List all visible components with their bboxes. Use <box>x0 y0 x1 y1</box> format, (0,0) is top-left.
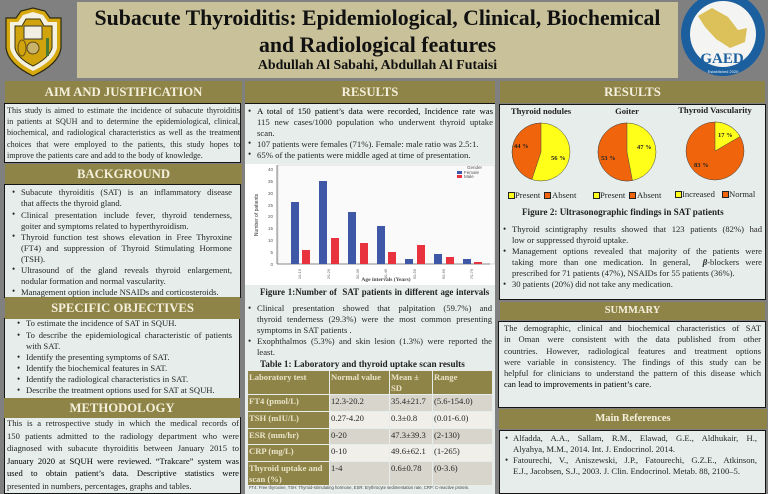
list: objectives: To estimate the incidence of SAT in SQUH. <box>26 318 177 328</box>
pie charts: ultrasonographic findings: 53 % <box>601 155 616 162</box>
list: results summary: scan. <box>257 128 275 138</box>
bar chart: patients by age interval: Male <box>464 174 474 179</box>
legend: thyroid nodules: Present <box>515 190 540 200</box>
table: laboratory results: 49.6±62.1 <box>391 446 426 456</box>
panel: specific objectives <box>4 318 240 399</box>
list: results summary: A total of 150 patient’s data were recorded, Incidence rate was <box>257 106 493 116</box>
list: clinical presentation: symptoms in SAT patients . <box>257 325 352 335</box>
list: objectives: Identify the radiological characteristics in SAT. <box>26 374 188 384</box>
list: results summary: 65% of the patients were middle aged at time of presentation. <box>257 150 470 160</box>
panel: background <box>4 184 241 298</box>
legend: goiter: Present <box>600 190 625 200</box>
pie charts: ultrasonographic findings: Goiter <box>615 106 639 116</box>
text: summary: can lead to improvements in patient’s care. <box>504 379 651 389</box>
list: clinical presentation: Exophthalmos (5.3%) and skin lesion (1.3%) were reported the <box>257 336 492 346</box>
text: summary: helpful for clinicians to understand the pattern of this disease which <box>504 368 761 378</box>
table: laboratory results: 0.6±0.78 <box>391 463 422 473</box>
text: methodology: This is a retrospective study in which the medical records of <box>7 418 239 428</box>
table: laboratory results: (0-3.6) <box>434 463 458 473</box>
bar chart: patients by age interval: 20-29 <box>326 268 331 279</box>
bar chart: patients by age interval: 10-19 <box>297 268 302 279</box>
bar chart: patients by age interval: 5 <box>270 250 273 255</box>
bar chart: patients by age interval: Number of patients <box>254 193 260 236</box>
table: laboratory results: 0-10 <box>331 446 347 456</box>
caption: table 1: Table 1: Laboratory and thyroid uptake scan results <box>260 359 465 369</box>
table: laboratory results: Laboratory test <box>249 372 307 382</box>
list: references <box>513 433 757 476</box>
logo: GAED: GAED <box>700 51 744 67</box>
text: aim: improve the patients care and add to the body of knowledge. <box>7 151 203 160</box>
panel: specific objectives: • <box>17 363 20 373</box>
panel: main references <box>499 430 766 494</box>
panel: specific objectives: • <box>17 385 20 395</box>
panel: specific objectives: • <box>17 352 20 362</box>
heading: results middle: RESULTS <box>342 85 398 99</box>
bar chart: patients by age interval <box>245 164 495 285</box>
list: background points: goiter and symptoms related to hyperthyroidism. <box>21 221 189 231</box>
panel: results middle <box>245 103 495 494</box>
logo: university shield <box>5 7 62 76</box>
text: methodology: 150 patients admitted to the radiology department who were <box>7 430 239 440</box>
bar chart: patients by age interval: 40 <box>268 167 273 172</box>
list: scintigraphy and management: prescribed for 71 patients (47%), NSAIDs for 55 patients (36%). <box>512 268 735 278</box>
heading: results right <box>500 81 765 103</box>
table: laboratory results: (2-130) <box>434 430 460 440</box>
text: aim: This study is aimed to estimate the incidence of subacute thyroiditis <box>7 106 240 115</box>
bar chart: patients by age interval: 10 <box>268 238 273 243</box>
panel: results middle: • <box>248 336 251 346</box>
table footnote: FT4: Free thyroxine, TSH: Thyroid-stimulating hormone, ESR: Erythrocyte sedimentation rate, CRP: C-reactive protein. <box>249 485 469 490</box>
panel: background: • <box>12 286 15 296</box>
heading: methodology <box>4 398 240 418</box>
list: results summary: 107 patients were females (71%). Female: male ratio was 2.5:1. <box>257 139 478 149</box>
list: clinical presentation: least. <box>257 347 275 357</box>
table: laboratory results: 35.4±21.7 <box>391 396 426 406</box>
table: laboratory results: TSH (mIU/L) <box>249 413 299 423</box>
text: aim: biochemical, and radiological characteristics as well as the treatment <box>7 128 240 137</box>
text: methodology: diagnosed with subacute thyroiditis between January 2015 to <box>7 443 239 453</box>
legend: goiter <box>593 190 662 200</box>
panel: specific objectives: • <box>17 318 20 328</box>
table: laboratory results: Normal value <box>331 372 381 382</box>
pie charts: ultrasonographic findings: 17 % <box>718 132 733 139</box>
bar chart: patients by age interval: 15 <box>268 226 273 231</box>
list: scintigraphy and management: Thyroid scintigraphy results showed that 123 patients (82%) had <box>512 224 762 234</box>
panel: background: • <box>12 209 15 219</box>
panel: main references: • <box>505 455 508 465</box>
pie charts: ultrasonographic findings: Thyroid nodules <box>511 106 572 116</box>
bar chart: patients by age interval: 35 <box>268 179 273 184</box>
pie charts: ultrasonographic findings: 47 % <box>637 144 652 151</box>
heading: main references: Main References <box>595 413 671 424</box>
panel: results middle: • <box>248 303 251 313</box>
text: summary: countries. However, radiological features and treatment options <box>504 346 761 356</box>
bar chart: patients by age interval: Age intervals (Years) <box>361 276 411 283</box>
title banner: Abdullah Al Sabahi, Abdullah Al Futaisi <box>258 58 497 73</box>
table: laboratory results: 0-20 <box>331 430 347 440</box>
text: aim <box>7 106 240 160</box>
panel: background: • <box>12 231 15 241</box>
list: scintigraphy and management: Management options revealed that majority of the patients were <box>512 246 762 256</box>
heading: background <box>5 164 242 184</box>
table: laboratory results: (1-265) <box>434 446 460 456</box>
table: laboratory results: 0.3±0.8 <box>391 413 417 423</box>
list: objectives: Describe the treatment options used for SAT at SQUH. <box>26 385 215 395</box>
list: background points: (TSH). <box>21 254 45 264</box>
panel: results right: • <box>503 246 506 256</box>
list: references: E.J., Jacobsen, S.J., 2003. J. Clin. Endocrinol. Metab. 88, 2100–5. <box>513 466 740 476</box>
panel: results middle: • <box>248 138 251 148</box>
list: background points: nodular formation and normal vascularity. <box>21 276 166 286</box>
logo: GAED: Established 2020 <box>708 69 739 74</box>
pie charts: ultrasonographic findings: 56 % <box>551 155 566 162</box>
heading: aim and justification: AIM AND JUSTIFICATION <box>45 85 202 99</box>
title banner: Subacute Thyroiditis: Epidemiological, Clinical, Biochemical <box>95 6 660 30</box>
list: objectives <box>26 318 232 395</box>
pie charts: ultrasonographic findings <box>511 105 753 182</box>
list: scintigraphy and management: low or suppressed thyroid uptake. <box>512 235 628 245</box>
text: methodology <box>7 418 239 491</box>
bar chart: patients by age interval: 0 <box>270 262 273 267</box>
list: background points: (FT4) and suppression of Thyroid Stimulating Hormone <box>21 243 232 253</box>
legend: vascularity: Increased <box>682 189 715 199</box>
bar chart: patients by age interval: 30-39 <box>355 268 360 279</box>
legend: thyroid nodules: Absent <box>552 190 576 200</box>
list: background points: Clinical presentation include fever, thyroid tenderness, <box>21 210 232 220</box>
bar chart: patients by age interval: 60-69 <box>441 268 446 279</box>
panel: results middle: • <box>248 106 251 116</box>
panel: specific objectives: • <box>17 374 20 384</box>
text: aim: choices that were employed to the patients, this study hopes to <box>7 140 240 149</box>
heading: results right: RESULTS <box>604 85 661 99</box>
table: laboratory results: ESR (mm/hr) <box>249 430 299 440</box>
pie charts: ultrasonographic findings: 44 % <box>514 143 529 150</box>
list: background points <box>21 187 232 297</box>
table: laboratory results: 1-4 <box>331 463 342 473</box>
panel: results middle: • <box>248 149 251 159</box>
list: results summary <box>257 106 493 160</box>
heading: methodology: METHODOLOGY <box>69 401 175 415</box>
heading: summary <box>500 302 765 320</box>
list: objectives: with SAT. <box>26 341 60 351</box>
bar chart: patients by age interval: Female <box>464 170 480 175</box>
table: laboratory results: Mean ± <box>391 372 419 382</box>
panel: results right: • <box>503 224 506 234</box>
heading: specific objectives <box>5 297 240 319</box>
table: laboratory results: 0.27-4.20 <box>331 413 364 423</box>
heading: main references <box>499 409 767 429</box>
heading: background: BACKGROUND <box>77 167 170 181</box>
text: methodology: used to obtain patient’s data. Descriptive statistics were <box>7 468 239 478</box>
list: background points: Subacute thyroiditis (SAT) is an inflammatory disease <box>21 187 232 197</box>
list: scintigraphy and management <box>512 224 762 289</box>
bar chart: patients by age interval: 50-59 <box>412 268 417 279</box>
panel: background: • <box>12 264 15 274</box>
list: clinical presentation: thyroid tenderness (29.3%) were the most common presenting <box>257 314 492 324</box>
bar chart: patients by age interval: 25 <box>268 203 273 208</box>
list: references: Alyahya, M.M., 2014. Int. J. Endocrinol. 2014. <box>513 444 675 454</box>
list: references: Alfadda, A.A., Sallam, R.M., Elawad, G.E., Aldhukair, H., <box>513 433 757 443</box>
text: aim: in patients at SQUH and to determine the epidemiological, clinical, <box>7 117 240 126</box>
list: background points: that affects the thyroid gland. <box>21 198 122 208</box>
bar chart: patients by age interval: 40-49 <box>383 268 388 279</box>
heading: summary: SUMMARY <box>605 305 660 316</box>
table: laboratory results: 12.3-20.2 <box>331 396 364 406</box>
table: laboratory results: Range <box>434 372 457 382</box>
bar chart: patients by age interval: Gender <box>467 165 483 170</box>
table: laboratory results: 47.3±39.3 <box>391 430 426 440</box>
list: objectives: To describe the epidemiological characteristic of patients <box>26 330 232 340</box>
table: laboratory results <box>248 371 492 485</box>
bar chart: patients by age interval: 70-79 <box>469 268 474 279</box>
logo: GAED <box>681 0 765 76</box>
panel: specific objectives: • <box>17 330 20 340</box>
list: objectives: Identify the biochemical features in SAT. <box>26 363 167 373</box>
text: summary: in Oman were consistent with the data published from other <box>504 334 761 344</box>
panel: summary <box>498 321 766 408</box>
legend: goiter: Absent <box>637 190 661 200</box>
list: clinical presentation <box>257 303 492 357</box>
list: scintigraphy and management: taking more than one medication. In general, β-blockers were <box>512 257 762 267</box>
list: objectives: Identify the presenting symptoms of SAT. <box>26 352 170 362</box>
list: results summary: 115 new cases/1000 population who underwent thyroid uptake <box>257 117 493 127</box>
list: references: Fatourechi, V., Aniszewski, J.P., Fatourechi, G.Z.E., Atkinson, <box>513 455 757 465</box>
heading: aim and justification <box>5 81 242 103</box>
text: methodology: January 2020 at SQUH were reviewed. “Trakcare” system was <box>7 456 239 466</box>
heading: results middle <box>245 81 495 103</box>
panel: methodology <box>4 417 241 494</box>
text: methodology: presented in numbers, percentages, graphs and tables. <box>7 480 191 490</box>
table: laboratory results: (5.6-154.0) <box>434 396 473 406</box>
legend: thyroid nodules <box>508 190 576 200</box>
table: laboratory results: CRP (mg/L) <box>249 446 294 456</box>
title banner: and Radiological features <box>259 33 496 57</box>
pie charts: ultrasonographic findings: 83 % <box>694 162 709 169</box>
bar chart: patients by age interval: 30 <box>268 191 273 196</box>
pie charts: ultrasonographic findings: Thyroid Vascularity <box>678 105 753 115</box>
table: laboratory results: FT4 (pmol/L) <box>249 396 299 406</box>
legend: vascularity: Normal <box>729 189 755 199</box>
panel: aim and justification <box>4 103 241 163</box>
table: laboratory results: scan (%) <box>249 474 282 484</box>
text: summary: were variable in consistency. The findings of this study can be <box>504 357 761 367</box>
text: summary: The demographic, clinical and biochemical characteristics of SAT <box>504 323 761 333</box>
table: laboratory results: SD <box>391 383 402 393</box>
title banner <box>77 2 678 78</box>
list: scintigraphy and management: 30 patients (20%) did not take any medication. <box>512 279 673 289</box>
heading: specific objectives: SPECIFIC OBJECTIVES <box>51 301 194 315</box>
text: summary <box>504 323 761 389</box>
panel: background: • <box>12 187 15 197</box>
caption: figure 2: Figure 2: Ultrasonographic findings in SAT patients <box>522 207 724 217</box>
list: background points: Ultrasound of the gland reveals thyroid enlargement, <box>21 265 232 275</box>
panel: results right: • <box>503 279 506 289</box>
table: laboratory results: (0.01-6.0) <box>434 413 468 423</box>
list: background points: Management option include NSAIDs and corticosteroids. <box>21 287 219 297</box>
legend: vascularity <box>675 189 756 199</box>
panel: results right <box>499 104 766 300</box>
table: laboratory results: Thyroid uptake and <box>249 463 322 473</box>
list: background points: Thyroid function test shows elevation in Free Thyroxine <box>21 232 232 242</box>
bar chart: patients by age interval: 20 <box>268 214 273 219</box>
list: clinical presentation: Clinical presentation showed that palpitation (59.7%) and <box>257 303 492 313</box>
panel: main references: • <box>505 433 508 443</box>
caption: figure 1: Figure 1:Number of SAT patients in different age intervals <box>260 287 489 297</box>
